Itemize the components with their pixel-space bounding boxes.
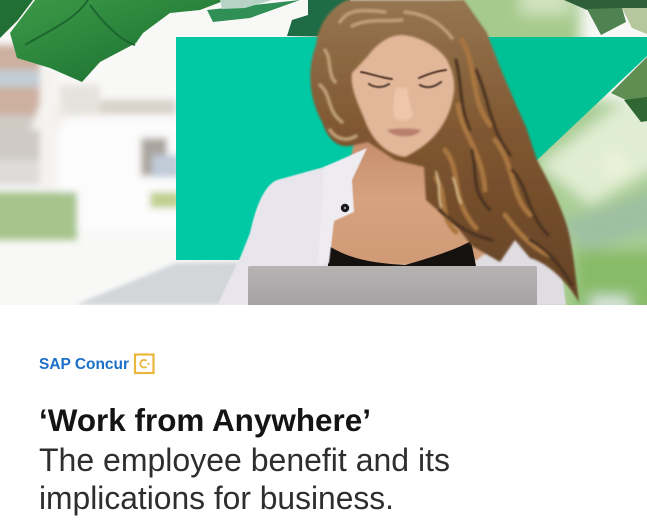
face bbox=[352, 35, 454, 157]
woman bbox=[218, 0, 579, 306]
hero photo bbox=[0, 0, 647, 330]
hair curls bbox=[320, 11, 572, 285]
teal panel bbox=[176, 37, 647, 260]
eyes and brows bbox=[361, 70, 446, 87]
logo icon bbox=[135, 354, 154, 373]
shirt button bbox=[341, 204, 349, 212]
hair mass bbox=[310, 0, 579, 302]
logo: SAP Concur bbox=[39, 354, 154, 373]
heading line 2: The employee benefit and its bbox=[39, 442, 450, 478]
shirt bbox=[219, 163, 336, 305]
heading line 3: implications for business. bbox=[39, 480, 394, 516]
blurred background: terrace bbox=[0, 45, 240, 305]
laptop bbox=[248, 266, 537, 306]
top-right leaves bbox=[564, 0, 647, 122]
collar bbox=[324, 148, 368, 264]
chest and neck bbox=[328, 130, 490, 265]
nose and mouth bbox=[387, 88, 421, 136]
logo wordmark: SAP Concur bbox=[39, 356, 129, 373]
heading bbox=[39, 402, 450, 516]
blurred background: foliage right bbox=[455, 0, 647, 330]
black top bbox=[328, 241, 476, 266]
heading line 1: ‘Work from Anywhere’ bbox=[39, 402, 371, 438]
top-left banana leaves bbox=[0, 0, 350, 82]
